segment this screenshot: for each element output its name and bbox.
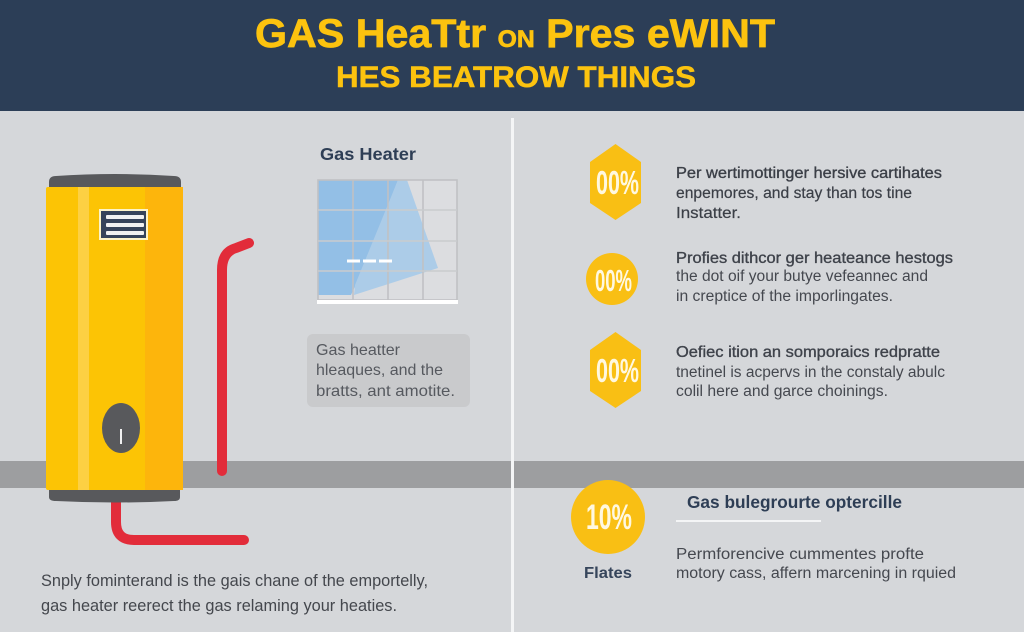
window diagram (317, 180, 458, 304)
stat 4 text: motory cass, affern marcening in rquied (676, 565, 956, 582)
note box (307, 334, 470, 407)
stat 3 text (676, 344, 945, 400)
bottom-left description (41, 572, 428, 615)
stat 2 text: the dot oif your butye vefeannec and (676, 268, 928, 285)
header banner (0, 0, 1024, 111)
red side pipe (222, 243, 249, 471)
top cap (49, 174, 181, 188)
tank body (46, 187, 183, 490)
stat 1 text: enpemores, and stay than tos tine (676, 185, 912, 202)
stat 2 text: Profies dithcor ger heateance hestogs (676, 250, 953, 267)
bottom-left description: Snply fominterand is the gais chane of the emportelly, (41, 572, 428, 590)
stat 2 text: in creptice of the imporlingates. (676, 288, 893, 305)
control knob (102, 403, 140, 453)
stat 2 text (676, 250, 953, 305)
bottom-left description: gas heater reerect the gas relaming your heaties. (41, 597, 397, 615)
stat 3 hexagon (590, 332, 641, 408)
stat 1 hexagon (590, 144, 641, 220)
stat 2 circle (586, 253, 638, 305)
stat 3 text: Oefiec ition an somporaics redpratte (676, 344, 940, 361)
stat 3 hexagon: 00% (596, 352, 639, 389)
stat 4 circle (571, 480, 645, 554)
stat 4 circle: 10% (586, 498, 632, 537)
stat 1 text: Per wertimottinger hersive cartihates (676, 165, 942, 182)
subtitle: HES BEATROW THINGS (336, 61, 696, 94)
stat 4 text: Permforencive cummentes profte (676, 546, 924, 563)
icon: gas heater tank (46, 174, 244, 540)
title: GAS HeaTtr ON Pres eWINT (255, 12, 775, 56)
note box: Gas heatter (316, 342, 401, 359)
stat 3 text: tnetinel is acpervs in the constaly abulc (676, 364, 945, 381)
bottom cap (49, 489, 180, 502)
stat 1 text: Instatter. (676, 205, 741, 222)
note box: hleaques, and the (316, 362, 443, 379)
floor band (0, 461, 1024, 488)
bottom outlet pipe (116, 500, 244, 540)
diagram heading: Gas Heater (320, 144, 416, 164)
center divider (511, 118, 514, 632)
stat 4 text (676, 546, 956, 582)
stat 4 heading: Gas bulegrourte optercille (687, 492, 902, 512)
stat 1 text (676, 165, 942, 222)
heading underline (676, 520, 821, 522)
stat 1 hexagon: 00% (596, 164, 639, 201)
stat 2 circle: 00% (595, 263, 632, 298)
stat 4 label: Flates (584, 565, 632, 582)
vent plate (99, 209, 148, 240)
stat 3 text: colil here and garce choinings. (676, 383, 888, 400)
note box: bratts, ant amotite. (316, 383, 455, 400)
